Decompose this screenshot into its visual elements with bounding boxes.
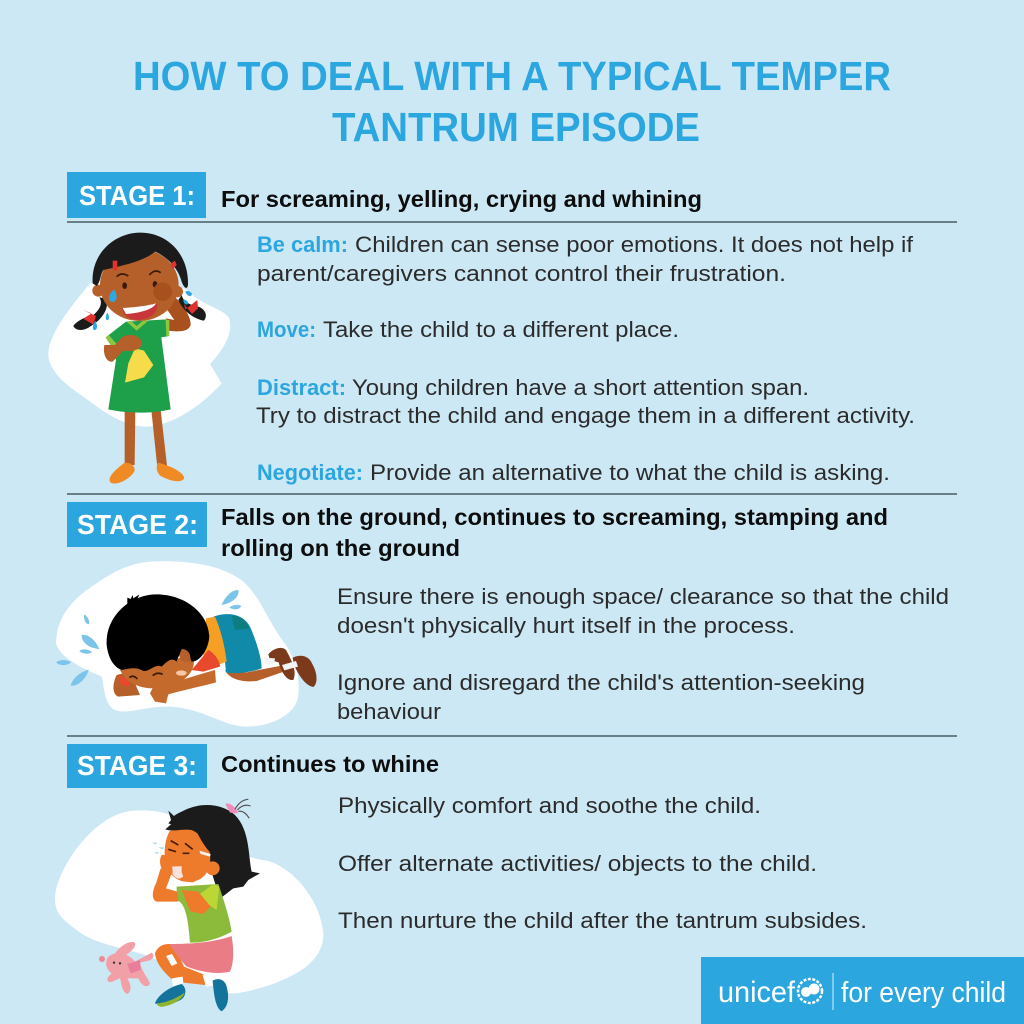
illustration: crying girl with handkerchief — [48, 233, 230, 484]
stage 3 advice text: Offer alternate activities/ objects to the child. — [338, 851, 817, 876]
hair — [107, 594, 209, 671]
shirt — [177, 884, 232, 943]
pigtails — [73, 295, 206, 330]
hair — [93, 233, 188, 288]
shoes — [110, 463, 184, 484]
stage 2 badge: STAGE 2: — [77, 509, 198, 540]
stage 3 badge: STAGE 3: — [77, 750, 197, 781]
stage 2 heading: Falls on the ground, continues to screaming, stamping and — [221, 504, 888, 530]
shirt — [203, 617, 227, 667]
tears — [93, 289, 192, 330]
dress — [106, 319, 171, 413]
title: TANTRUM EPISODE — [332, 104, 700, 150]
handkerchief — [125, 348, 153, 383]
distract tip — [256, 375, 915, 428]
socks — [264, 658, 298, 670]
teddy — [106, 953, 153, 994]
negotiate tip: Negotiate: — [257, 460, 363, 485]
hair tie — [225, 804, 238, 813]
closed eyes — [129, 673, 163, 679]
mouth — [170, 866, 186, 879]
stage 2 heading — [221, 504, 888, 561]
head — [165, 828, 210, 882]
fringe — [165, 810, 219, 858]
left arm and hand — [104, 335, 142, 362]
be calm tip: Be calm: — [257, 232, 348, 257]
be calm tip: parent/caregivers cannot control their frustration. — [257, 261, 786, 286]
stage 2 advice text: doesn't physically hurt itself in the process. — [337, 613, 795, 638]
tears — [152, 843, 164, 854]
legs — [225, 666, 284, 681]
move tip: Take the child to a different place. — [323, 317, 679, 342]
distract tip: Distract: — [257, 375, 346, 400]
stage 3 advice text: Physically comfort and soothe the child. — [338, 793, 761, 818]
illustration: girl whining with dropped teddy — [55, 799, 323, 1011]
stage 1 heading: For screaming, yelling, crying and whining — [221, 186, 702, 212]
be calm tip — [257, 232, 914, 286]
stage 2 badge — [67, 502, 207, 547]
tears — [56, 590, 241, 686]
shoes — [155, 979, 228, 1011]
shorts — [213, 614, 262, 673]
stage 1 badge — [67, 172, 206, 218]
stage 2 advice text: Ensure there is enough space/ clearance so that the child — [337, 584, 949, 609]
icon: unicef emblem — [798, 979, 822, 1003]
fist at eye — [153, 282, 172, 301]
arms — [113, 672, 140, 697]
title — [133, 53, 891, 150]
stage 2 heading: rolling on the ground — [221, 535, 460, 561]
right arm — [162, 290, 191, 331]
stage 2 advice text: Ignore and disregard the child's attention-seeking — [337, 670, 865, 695]
brows and eyes — [168, 841, 193, 853]
move tip: Move: — [257, 317, 316, 342]
stage 3 badge — [67, 744, 207, 788]
illustration: boy lying on the ground — [56, 561, 317, 727]
distract tip: Try to distract the child and engage them in a different activity. — [256, 403, 915, 428]
negotiate tip: Provide an alternative to what the child is asking. — [370, 460, 890, 485]
face — [120, 658, 194, 688]
arms — [153, 868, 211, 914]
distract tip: Young children have a short attention span. — [352, 375, 809, 400]
eyes and brows — [122, 282, 127, 289]
stage 2 advice text — [337, 584, 949, 724]
stage 1 advice text — [256, 232, 915, 485]
head — [100, 249, 179, 321]
stage 3 heading: Continues to whine — [221, 751, 439, 777]
be calm tip: Children can sense poor emotions. It does not help if — [355, 232, 914, 257]
unicef logo banner: for every child — [841, 977, 1006, 1009]
stage 3 advice text: Then nurture the child after the tantrum subsides. — [338, 908, 867, 933]
legs — [125, 410, 167, 468]
legs — [155, 944, 205, 985]
stage 1 badge: STAGE 1: — [79, 180, 195, 211]
stage 3 advice text — [338, 793, 867, 933]
stage 2 advice text: behaviour — [337, 699, 441, 724]
shoes — [268, 648, 317, 687]
mouth — [122, 303, 157, 320]
title: HOW TO DEAL WITH A TYPICAL TEMPER — [133, 53, 891, 99]
hands — [160, 855, 198, 882]
unicef logo banner — [701, 957, 1024, 1024]
back hair — [168, 805, 260, 897]
unicef logo banner: unicef — [718, 976, 796, 1009]
skirt — [169, 936, 233, 973]
